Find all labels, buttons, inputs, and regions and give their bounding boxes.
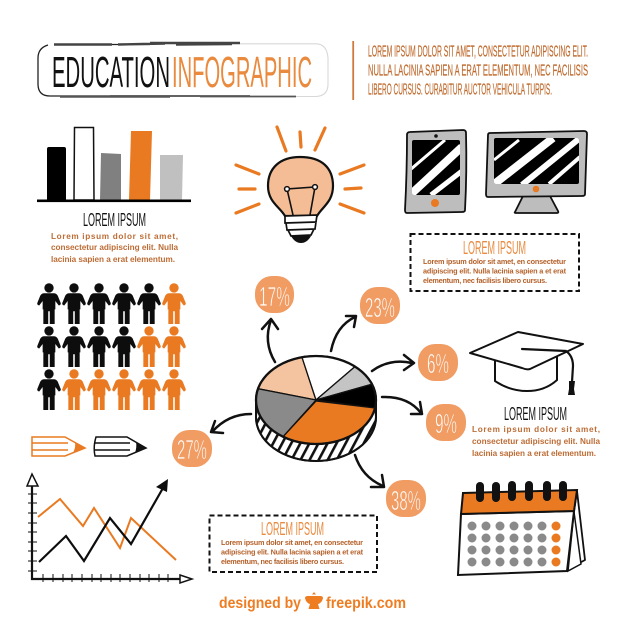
badge: 27% <box>172 430 212 467</box>
badge: 9%: 9% <box>435 408 457 439</box>
callout: top right dashed box: elementum, nec facilisis libero cursus. <box>423 276 547 285</box>
callout: bottom dashed box: elementum, nec facilisis libero cursus. <box>221 557 344 566</box>
slice: black <box>316 384 376 408</box>
date dots <box>468 522 560 566</box>
text block: bar chart: Lorem ipsum dolor sit amet, <box>51 232 178 241</box>
callout: top right dashed box: Lorem ipsum dolor sit amet, en consectetur <box>423 257 566 266</box>
pie chart <box>256 356 376 461</box>
callout: top right dashed box <box>410 234 579 291</box>
badge: 17%: 17% <box>259 281 290 312</box>
series: orange line <box>38 499 176 560</box>
icon: calendar <box>458 481 585 575</box>
series: black arrow line <box>39 488 163 562</box>
arrows from pie chart <box>211 316 422 487</box>
slice: peach <box>258 357 316 400</box>
icon: graduation cap <box>470 332 583 395</box>
badge: 23% <box>360 287 400 324</box>
badge: 17% <box>255 276 294 313</box>
callout: bottom dashed box <box>210 516 377 572</box>
callout: top right dashed box: adipiscing elit. Nulla lacinia sapien a et erat <box>423 266 567 276</box>
slice: light grey <box>316 367 372 400</box>
bar chart <box>37 128 191 202</box>
badge: 6%: 6% <box>427 348 449 379</box>
text block: bar chart: consectetur adipiscing elit. Nulla <box>51 243 178 252</box>
spiral binding <box>476 481 567 502</box>
badge: 9% <box>426 404 466 441</box>
badge: 38% <box>386 480 426 517</box>
icon: freepik logo <box>305 592 323 609</box>
title banner: INFOGRAPHIC <box>172 48 312 97</box>
slice: dark grey <box>256 389 316 437</box>
badge: 38%: 38% <box>391 485 421 516</box>
text block: graduation cap: consectetur adipiscing elit. Nulla <box>472 437 600 446</box>
icon: desktop monitor <box>486 131 587 213</box>
text block: graduation cap: lacinia sapien a erat elementum. <box>472 449 596 458</box>
footer credit: freepik.com <box>326 595 406 612</box>
icon: orange pencil <box>32 437 85 456</box>
intro paragraph <box>352 41 588 100</box>
icon: black pencil <box>94 437 146 456</box>
title banner: EDUCATION <box>52 48 170 97</box>
callout: top right dashed box: LOREM IPSUM <box>463 238 526 258</box>
text block: graduation cap <box>472 404 600 458</box>
icon: tablet <box>405 130 466 213</box>
text block: graduation cap: Lorem ipsum dolor sit amet, <box>472 425 600 434</box>
badge: 27%: 27% <box>177 434 207 465</box>
callout: bottom dashed box: LOREM IPSUM <box>261 519 324 539</box>
footer credit <box>219 592 406 612</box>
slice: white <box>302 356 355 400</box>
text block: bar chart <box>51 210 178 264</box>
badge: 23%: 23% <box>365 292 395 323</box>
line chart <box>27 474 192 583</box>
callout: bottom dashed box: Lorem ipsum dolor sit amet, en consectetur <box>221 538 363 547</box>
pictogram: people grid <box>37 283 186 410</box>
footer credit: designed by <box>219 595 301 612</box>
arrowhead <box>156 479 168 492</box>
slice: orange <box>283 401 375 444</box>
text block: bar chart: LOREM IPSUM <box>83 210 146 230</box>
icon: light bulb <box>236 127 364 243</box>
callout: bottom dashed box: adipiscing elit. Nulla lacinia sapien a et erat <box>221 548 364 556</box>
text block: bar chart: lacinia sapien a erat elementum. <box>51 255 175 264</box>
badge: 6% <box>418 344 458 381</box>
